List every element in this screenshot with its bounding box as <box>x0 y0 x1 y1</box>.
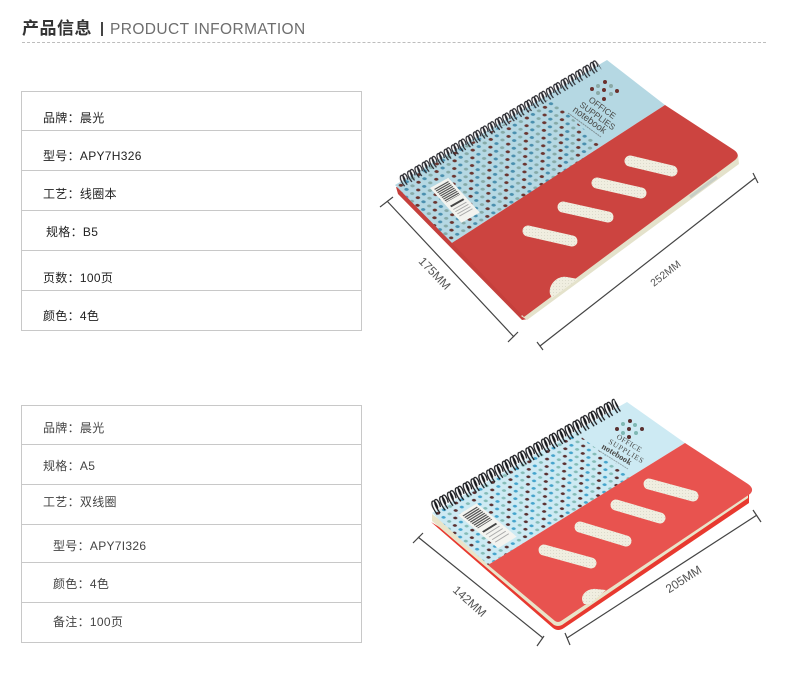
row: pages: 页数：100页 <box>43 271 113 285</box>
blue cover section <box>432 402 685 565</box>
cover title: notebook <box>570 105 609 137</box>
dimension: 252MM <box>537 173 758 350</box>
red cover section <box>488 443 752 622</box>
dimension: 205MM <box>565 510 761 645</box>
row: notes: 备注：100页 <box>53 615 123 629</box>
corner cut-out <box>582 589 606 604</box>
row: model: 型号：APY7H326 <box>43 149 142 163</box>
dimension: 142MM: 142MM <box>450 583 489 620</box>
row: size: 规格：A5 <box>43 459 95 473</box>
dimension: 252MM: 252MM <box>648 258 683 289</box>
cover title <box>598 432 646 469</box>
dimension: 142MM <box>413 533 544 646</box>
barcode label <box>458 503 517 548</box>
spiral binding <box>429 398 622 516</box>
row: colours: 颜色：4色 <box>53 577 109 591</box>
dot pattern <box>398 100 599 241</box>
cover title: OFFICE <box>615 432 644 454</box>
cover title: SUPPLIES <box>607 437 646 465</box>
heading: English title: PRODUCT INFORMATION <box>110 21 306 38</box>
dot pattern <box>435 434 630 565</box>
row: craft: 工艺：线圈本 <box>43 187 117 201</box>
cover logo dots <box>615 419 644 439</box>
dimension: 175MM: 175MM <box>416 254 454 293</box>
panel: B5 specification table <box>21 91 362 331</box>
cut-out slots <box>544 484 693 563</box>
row: brand: 品牌：晨光 <box>43 111 105 125</box>
cut-out slots <box>528 161 672 241</box>
row: brand: 品牌：晨光 <box>43 421 105 435</box>
cover title: OFFICE <box>587 95 618 121</box>
heading: product information <box>22 19 766 43</box>
back cover <box>431 490 749 630</box>
red cover section <box>452 105 738 317</box>
panel: A5 specification table <box>21 405 362 643</box>
page block <box>521 155 739 320</box>
row: craft: 工艺：双线圈 <box>43 495 117 509</box>
corner cut-out <box>550 277 578 298</box>
heading: Chinese title: 产品信息 <box>22 19 92 38</box>
notebook: A5 product photo <box>428 398 752 630</box>
blue cover section <box>395 60 665 243</box>
dimension: 175MM <box>380 197 518 342</box>
row: model: 型号：APY7I326 <box>53 539 146 553</box>
back cover <box>396 187 528 320</box>
row: colours: 颜色：4色 <box>43 309 99 323</box>
heading: separator bar <box>101 22 103 36</box>
dimension: 205MM: 205MM <box>663 563 704 596</box>
cover title: notebook <box>600 441 634 467</box>
spiral binding <box>398 59 602 188</box>
barcode label <box>430 178 480 223</box>
cover logo dots <box>590 80 619 101</box>
cover title <box>568 95 618 137</box>
cover title: SUPPLIES <box>578 100 618 132</box>
row: size: 规格：B5 <box>46 225 98 239</box>
page block <box>432 488 748 626</box>
notebook: B5 product photo <box>390 59 739 320</box>
